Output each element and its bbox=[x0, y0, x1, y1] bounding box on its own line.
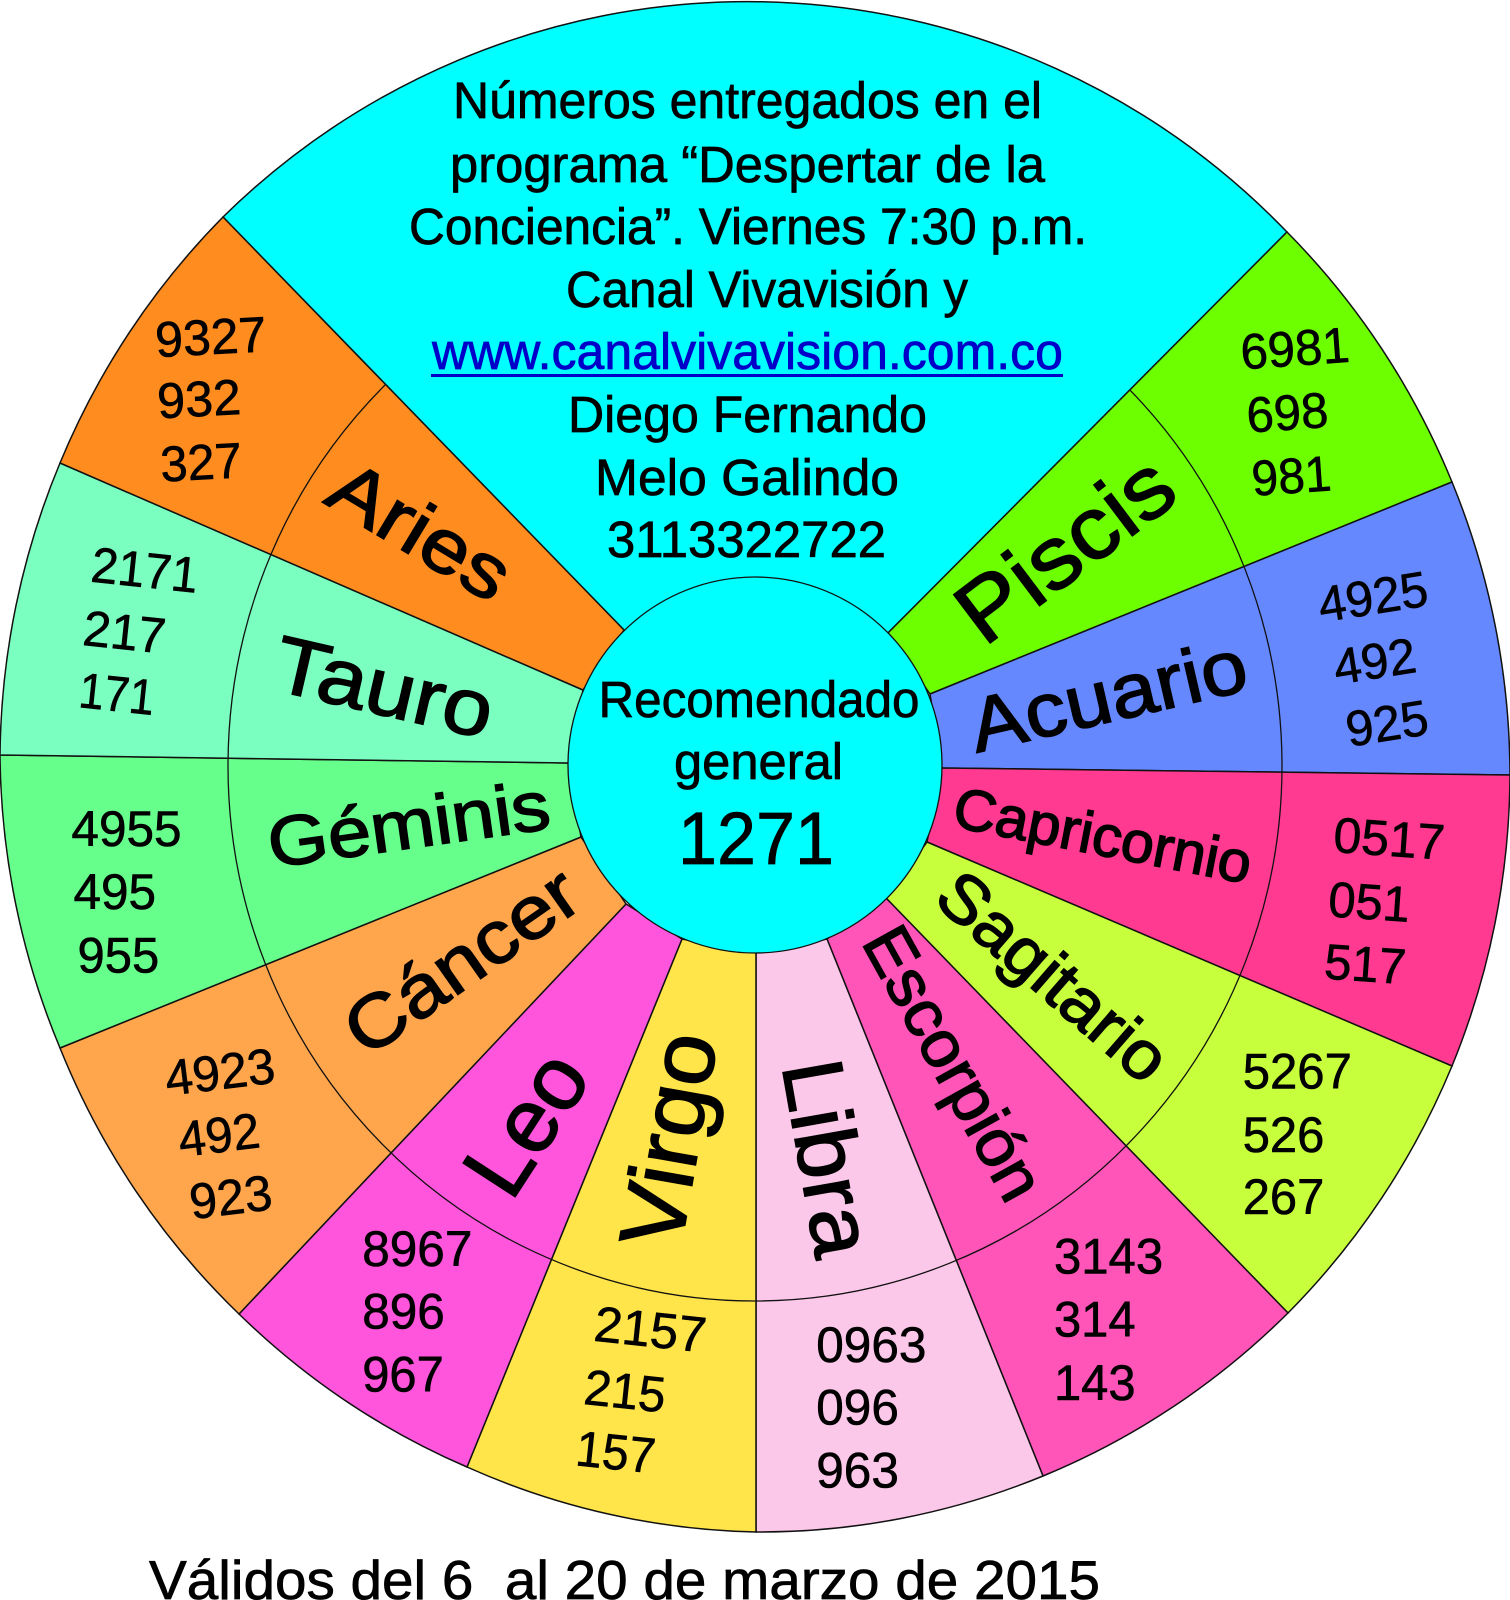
numbers: Aries: 327 bbox=[159, 432, 243, 493]
numbers: Libra: 0963 bbox=[816, 1317, 926, 1373]
center circle bbox=[568, 577, 942, 953]
text block: program information: 3113322722 bbox=[607, 511, 886, 568]
numbers: Libra bbox=[816, 1317, 926, 1499]
numbers: Acuario bbox=[1314, 561, 1432, 758]
label: Aries: Aries bbox=[313, 444, 527, 619]
numbers: Géminis bbox=[71, 801, 182, 983]
numbers: Piscis: 6981 bbox=[1239, 317, 1351, 380]
sector: Libra bbox=[756, 939, 1043, 1532]
label: Capricornio: Capricornio bbox=[948, 775, 1257, 897]
numbers: Aries: 9327 bbox=[154, 306, 268, 368]
text block: program information: Números entregados en el bbox=[453, 72, 1042, 129]
numbers: Tauro bbox=[76, 537, 201, 726]
numbers: Capricornio: 0517 bbox=[1332, 807, 1447, 871]
numbers: Acuario: 4925 bbox=[1314, 561, 1432, 633]
label: Leo: Leo bbox=[444, 1034, 610, 1214]
numbers: Géminis: 4955 bbox=[71, 801, 182, 857]
numbers: Capricornio bbox=[1323, 807, 1447, 995]
sector: Cáncer bbox=[60, 837, 626, 1314]
numbers: Escorpión: 3143 bbox=[1054, 1228, 1163, 1284]
sector: Tauro bbox=[0, 463, 583, 763]
sector: Capricornio bbox=[927, 768, 1510, 1066]
numbers: Cáncer: 492 bbox=[175, 1102, 263, 1168]
numbers: Escorpión: 143 bbox=[1054, 1355, 1136, 1411]
numbers: Tauro: 171 bbox=[76, 662, 157, 726]
sector: Leo bbox=[239, 904, 682, 1467]
numbers: Sagitario: 526 bbox=[1243, 1107, 1324, 1163]
numbers: Capricornio: 517 bbox=[1323, 934, 1408, 995]
sign names bbox=[263, 434, 1257, 1264]
sector: Sagitario bbox=[886, 842, 1452, 1313]
numbers: Libra: 096 bbox=[816, 1379, 899, 1435]
text block: general recommendation bbox=[598, 671, 920, 880]
text block: general recommendation: Recomendado bbox=[598, 671, 920, 728]
numbers: Capricornio: 051 bbox=[1327, 871, 1412, 933]
numbers: Géminis: 495 bbox=[73, 864, 156, 920]
numbers: Cáncer bbox=[162, 1038, 278, 1230]
sector: Escorpión bbox=[827, 898, 1288, 1476]
numbers: Cáncer: 923 bbox=[186, 1165, 275, 1230]
numbers: Sagitario bbox=[1243, 1044, 1352, 1225]
sector: Géminis bbox=[0, 755, 581, 1048]
panel: top info sector bbox=[223, 2, 1287, 633]
numbers: Tauro: 2171 bbox=[89, 537, 201, 604]
text block: program information bbox=[409, 72, 1087, 568]
label: Libra: Libra bbox=[763, 1052, 892, 1264]
label: Virgo: Virgo bbox=[601, 1025, 737, 1255]
numbers: Leo: 967 bbox=[362, 1347, 444, 1403]
numbers: Piscis bbox=[1239, 317, 1351, 507]
sector: Acuario bbox=[930, 482, 1510, 775]
text block: program information: Diego Fernando bbox=[568, 386, 927, 443]
numbers: Libra: 963 bbox=[816, 1443, 899, 1499]
numbers: Aries bbox=[154, 306, 268, 493]
numbers: Virgo: 157 bbox=[573, 1420, 658, 1484]
label: Tauro: Tauro bbox=[266, 619, 502, 756]
numbers: Piscis: 698 bbox=[1245, 382, 1330, 444]
numbers: Cáncer: 4923 bbox=[162, 1038, 278, 1107]
label: Cáncer: Cáncer bbox=[328, 850, 595, 1072]
numbers: Sagitario: 267 bbox=[1243, 1169, 1324, 1225]
sector: Virgo bbox=[467, 939, 756, 1532]
numbers: Géminis: 955 bbox=[78, 927, 159, 983]
label: Escorpión: Escorpión bbox=[849, 913, 1060, 1213]
numbers: Virgo: 215 bbox=[581, 1359, 668, 1423]
text block: program information: programa “Despertar de la bbox=[450, 136, 1046, 193]
numbers: Acuario: 492 bbox=[1330, 627, 1420, 695]
text block: program information: Conciencia”. Viernes 7:30 p.m. bbox=[409, 198, 1087, 255]
numbers: Acuario: 925 bbox=[1342, 689, 1432, 758]
numbers: Sagitario: 5267 bbox=[1243, 1044, 1352, 1100]
numbers: Escorpión bbox=[1054, 1228, 1163, 1411]
numbers: Leo: 896 bbox=[362, 1283, 445, 1339]
label: Géminis: Géminis bbox=[263, 766, 555, 883]
label: Sagitario: Sagitario bbox=[922, 855, 1184, 1098]
numbers: Escorpión: 314 bbox=[1054, 1292, 1136, 1348]
label: Acuario: Acuario bbox=[961, 623, 1255, 769]
sector: Aries bbox=[60, 217, 624, 690]
text block: program information: Melo Galindo bbox=[595, 449, 899, 506]
text block: program information: www.canalvivavision.com.co bbox=[431, 323, 1063, 380]
sign numbers bbox=[71, 306, 1447, 1499]
numbers: Virgo: 2157 bbox=[592, 1296, 709, 1363]
numbers: Piscis: 981 bbox=[1250, 445, 1333, 507]
numbers: Leo bbox=[362, 1221, 472, 1403]
label: Piscis: Piscis bbox=[936, 434, 1193, 663]
numbers: Virgo bbox=[573, 1296, 709, 1484]
text block: program information: Canal Vivavisión y bbox=[566, 261, 968, 318]
text block: general recommendation: 1271 bbox=[678, 797, 834, 880]
sector: Piscis bbox=[888, 232, 1452, 694]
numbers: Aries: 932 bbox=[156, 369, 242, 429]
numbers: Leo: 8967 bbox=[362, 1221, 472, 1277]
numbers: Tauro: 217 bbox=[80, 600, 169, 664]
text block: general recommendation: general bbox=[674, 733, 843, 790]
